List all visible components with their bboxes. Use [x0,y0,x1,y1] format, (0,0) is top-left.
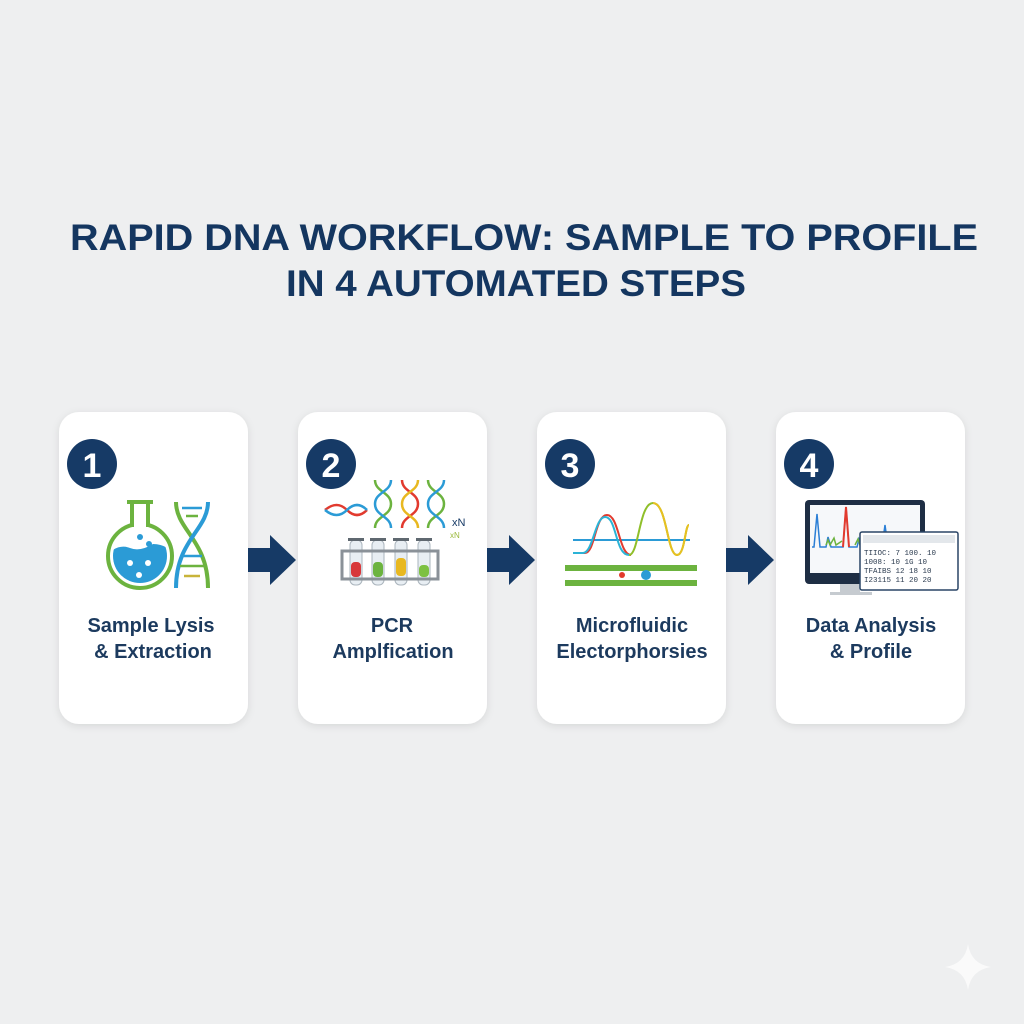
badge 3: 3 [561,447,579,485]
label 1 [87,615,215,663]
panel: step 3 [537,412,726,724]
icon: monitor with chart and table: TFAIBS 12 18 10 [864,568,932,576]
panel: step 2 [298,412,487,724]
icon: flask and DNA [108,500,208,590]
title: IN 4 AUTOMATED STEPS [286,263,746,304]
icon: sparkle [945,944,991,990]
label 4: & Profile [830,641,912,663]
icon: DNA strands and test tubes [325,480,466,585]
icon: DNA strands and test tubes: xN [452,517,466,529]
label 1: & Extraction [94,641,212,663]
badge 3 [545,439,595,489]
title: RAPID DNA WORKFLOW: SAMPLE TO PROFILE [70,217,978,258]
label 1: Sample Lysis [87,615,215,637]
icon: electropherogram and channel [573,503,690,555]
label 3: Microfluidic [576,615,688,637]
label 2: PCR [371,615,414,637]
arrow 3 [726,535,774,585]
icon: monitor with chart and table: TIIOC: 7 100. 10 [864,550,937,558]
icon: monitor with chart and table: 1008: 10 1G 10 [864,559,928,567]
badge 4 [784,439,834,489]
badge 2 [306,439,356,489]
label 2 [332,615,454,663]
title [70,217,978,304]
arrow 1 [248,535,296,585]
icon: monitor with chart and table [805,500,958,595]
icon: monitor with chart and table: I23115 11 20 20 [864,577,932,585]
icon: DNA strands and test tubes: xN [450,531,460,540]
badge 4: 4 [800,447,819,485]
panel: step 1 [59,412,248,724]
badge 2: 2 [322,447,340,485]
badge 1: 1 [83,447,101,485]
label 3: Electorphorsies [556,641,708,663]
panel: step 4 [776,412,965,724]
label 4 [806,615,936,663]
label 4: Data Analysis [806,615,936,637]
arrow 2 [487,535,535,585]
label 2: Amplfication [332,641,454,663]
badge 1 [67,439,117,489]
label 3 [556,615,708,663]
